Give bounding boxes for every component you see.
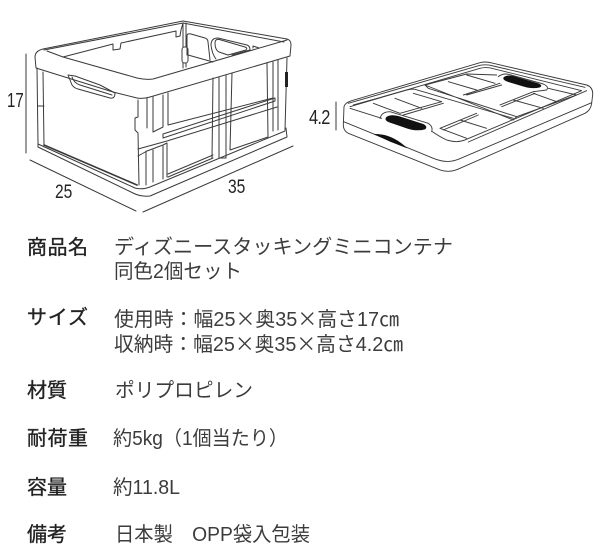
container rim — [35, 21, 291, 98]
spec row: volume — [27, 471, 180, 500]
spec row: load capacity: 約5kg（1個当たり） — [113, 427, 288, 450]
spec row: product name: 商品名 — [27, 231, 88, 260]
illustration: folded container — [309, 62, 593, 171]
spec row: size: 収納時：幅25×奥35×高さ4.2㎝ — [114, 328, 403, 357]
container interior: post, wall and back handle — [182, 23, 259, 68]
folded tray — [343, 62, 593, 171]
dimension 25 — [30, 160, 136, 211]
illustration: open container with dimensions — [7, 21, 293, 212]
left side wall — [37, 68, 44, 145]
spec row: volume: 容量 — [27, 471, 67, 500]
base tray — [38, 128, 287, 196]
spec row: load capacity — [27, 422, 288, 451]
latch — [285, 72, 288, 87]
spec row: notes: 日本製 OPP袋入包装 — [115, 523, 310, 546]
spec row: size — [27, 301, 403, 357]
dimension 25: 25 — [55, 180, 72, 202]
spec row: product name — [27, 231, 453, 283]
spec row: volume: 約11.8L — [113, 476, 180, 499]
dimension 17: 17 — [7, 89, 24, 112]
dimension 35 — [143, 146, 293, 212]
dimension 17 — [7, 54, 26, 153]
spec row: notes: 備考 — [27, 518, 67, 547]
handle slots — [385, 115, 426, 130]
dimension 4.2 — [309, 102, 336, 130]
spec row: load capacity: 耐荷重 — [27, 422, 88, 451]
spec row: size: サイズ — [27, 301, 88, 330]
spec row: notes — [27, 518, 310, 547]
spec row: material: 材質 — [27, 374, 67, 403]
front handle — [68, 75, 115, 98]
long side wall ribs and rail — [135, 58, 287, 185]
spec row: material — [27, 374, 253, 403]
spec row: material: ポリプロピレン — [115, 379, 253, 402]
spec row: size: 使用時：幅25×奥35×高さ17㎝ — [114, 303, 399, 332]
spec row: product name: ディズニースタッキングミニコンテナ — [114, 236, 453, 258]
spec row: product name: 同色2個セット — [114, 260, 242, 283]
dimension 4.2: 4.2 — [309, 105, 330, 128]
dimension 35: 35 — [228, 175, 245, 197]
